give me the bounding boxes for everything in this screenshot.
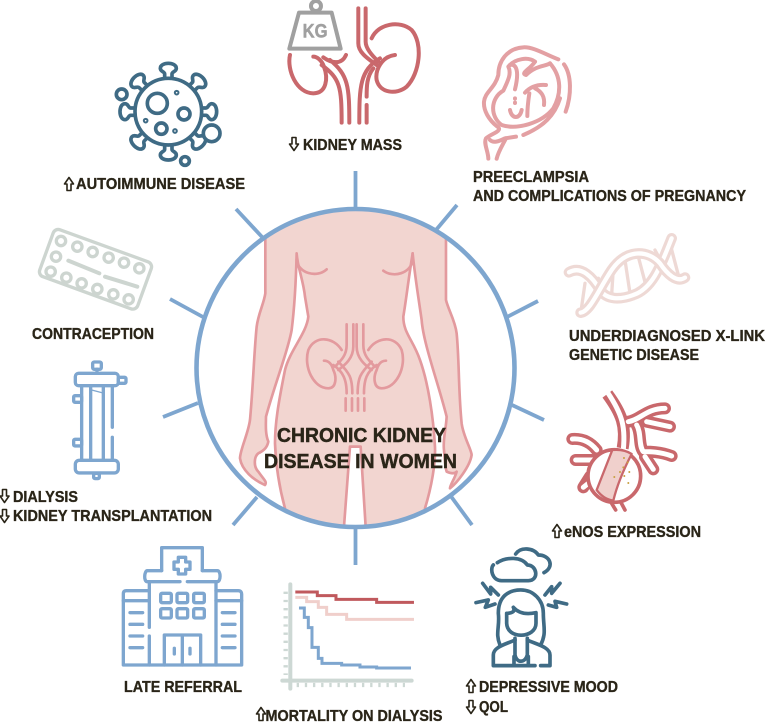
icon: dialyzer	[74, 362, 126, 479]
label: autoimmune disease: AUTOIMMUNE DISEASE	[76, 176, 245, 193]
label: dialysis and transplantation: KIDNEY TRANSPLANTATION	[13, 508, 212, 525]
label: depressive mood and QOL	[466, 679, 618, 716]
icon: virus	[116, 63, 220, 165]
icon: fetus in uterus	[484, 47, 570, 159]
label: dialysis and transplantation: DIALYSIS	[13, 489, 78, 506]
body silhouette	[240, 203, 472, 532]
central circle with body illustration	[163, 171, 544, 565]
label: mortality on dialysis: MORTALITY ON DIALYSIS	[266, 708, 442, 725]
label: depressive mood and QOL: DEPRESSIVE MOOD	[479, 679, 618, 696]
icon: DNA	[569, 238, 685, 313]
axes	[282, 584, 412, 689]
chart: mortality survival curves	[282, 584, 414, 689]
label: preeclampsia	[473, 169, 747, 205]
label: depressive mood and QOL: QOL	[479, 699, 508, 716]
label: late referral: LATE REFERRAL	[124, 679, 242, 696]
title	[264, 424, 457, 473]
icon: kidney with weight: KG	[303, 22, 328, 43]
icon: contraceptive pill blister	[38, 228, 153, 311]
circle ring	[196, 209, 514, 527]
weight	[289, 1, 341, 49]
label: kidney mass: KIDNEY MASS	[303, 137, 402, 154]
icon: kidney with weight	[289, 1, 419, 123]
label: preeclampsia: AND COMPLICATIONS OF PREGNANCY	[473, 188, 747, 205]
label: x-link genetic disease: GENETIC DISEASE	[569, 347, 699, 364]
icon: depressed woman	[476, 549, 567, 666]
label: preeclampsia: PREECLAMPSIA	[473, 169, 589, 186]
kidneys in body	[307, 324, 403, 411]
radial ticks	[163, 171, 544, 565]
label: eNOS expression: eNOS EXPRESSION	[564, 524, 701, 541]
label: dialysis and transplantation	[0, 489, 212, 525]
icon: endothelial vessel	[572, 392, 672, 510]
label: contraception: CONTRACEPTION	[32, 326, 154, 343]
title: CHRONIC KIDNEY	[277, 424, 446, 447]
label: x-link genetic disease	[569, 328, 766, 364]
title: DISEASE IN WOMEN	[264, 450, 457, 473]
icon: hospital	[123, 548, 242, 665]
